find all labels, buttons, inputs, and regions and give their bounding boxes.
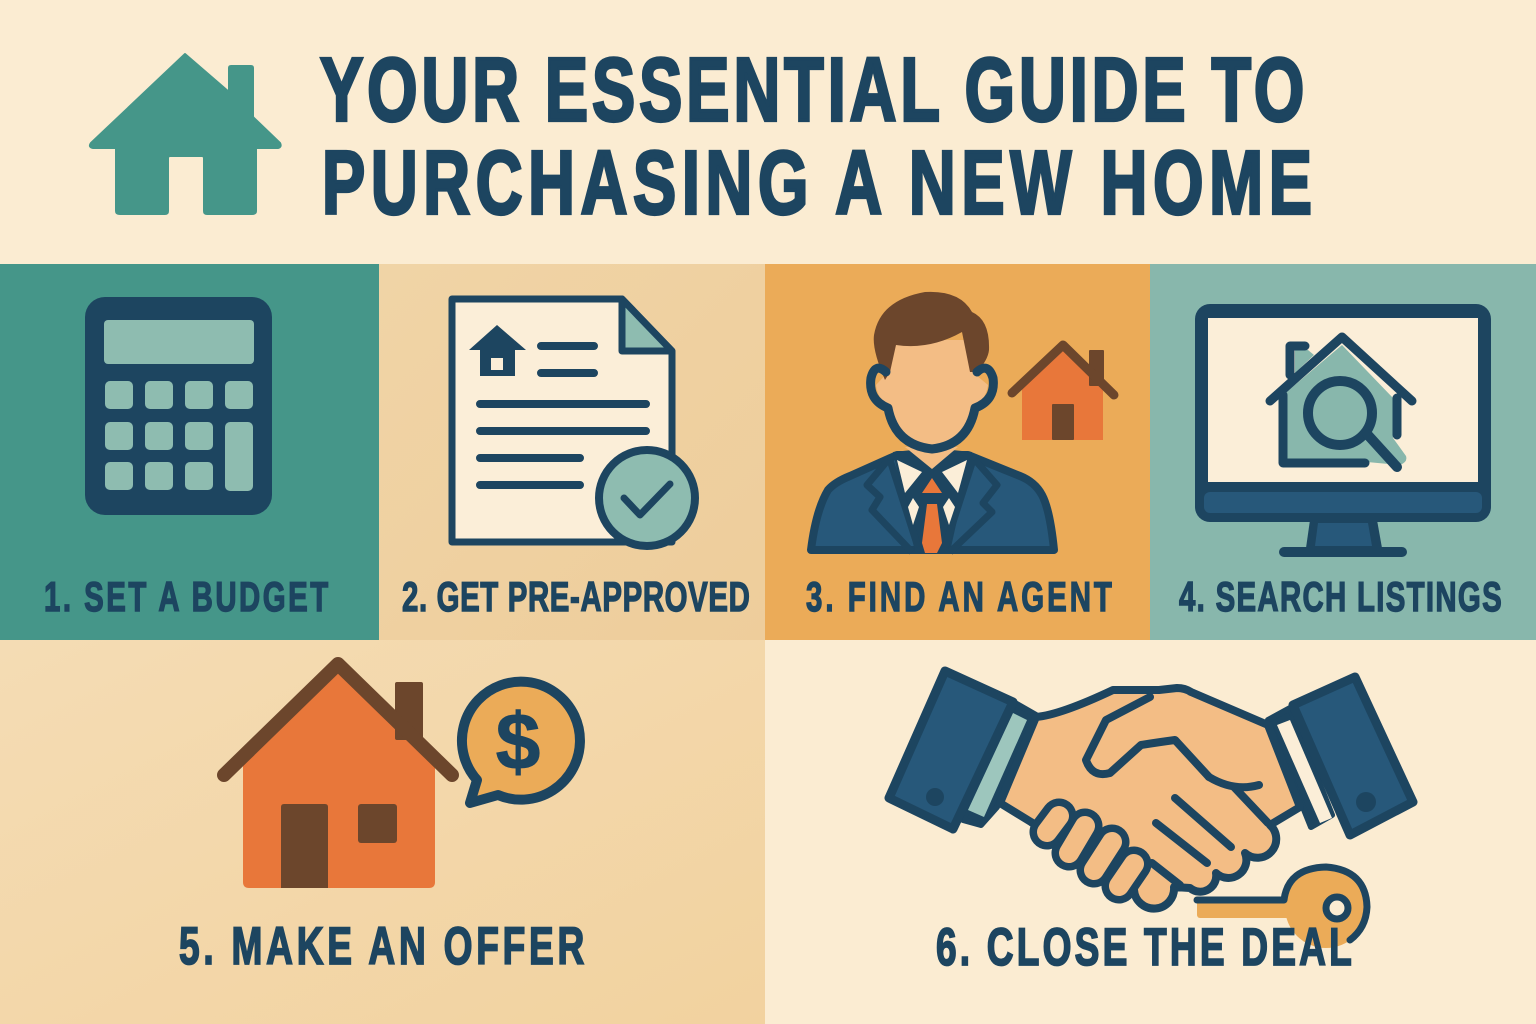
icon: key	[1197, 866, 1367, 948]
title	[320, 39, 1312, 233]
icon: handshake	[889, 671, 1413, 909]
icon: agent	[811, 292, 1054, 553]
hair	[874, 292, 989, 380]
icon: computer monitor with house search	[1195, 304, 1491, 557]
panel: step 3 find an agent	[765, 264, 1150, 640]
fingers	[1047, 816, 1134, 886]
cuffs	[963, 703, 1036, 825]
face	[876, 340, 988, 446]
icon: document with check	[452, 299, 695, 546]
icon: teal house	[90, 54, 281, 214]
label: step 2: 2. GET PRE-APPROVED	[402, 573, 750, 620]
icon: calculator	[85, 297, 272, 515]
label: step 5: 5. MAKE AN OFFER	[179, 916, 584, 976]
title: PURCHASING A NEW HOME	[322, 132, 1312, 233]
suit	[811, 455, 1054, 550]
title: YOUR ESSENTIAL GUIDE TO	[320, 39, 1304, 140]
panel: step 2 get pre-approved	[379, 264, 765, 640]
label: step 6: 6. CLOSE THE DEAL	[936, 917, 1352, 977]
icon: house with offer: $	[496, 697, 540, 786]
panel: step 4 search listings	[1150, 264, 1536, 640]
icon: house with offer	[224, 664, 580, 888]
icon: small orange house	[1012, 345, 1114, 440]
label: step 4: 4. SEARCH LISTINGS	[1179, 573, 1502, 620]
panel: step 6 close the deal	[765, 640, 1536, 1024]
label: step 1: 1. SET A BUDGET	[44, 573, 328, 620]
panel: step 5 make an offer	[0, 640, 765, 1024]
label: step 3: 3. FIND AN AGENT	[806, 573, 1112, 620]
panel: step 1 set a budget	[0, 264, 379, 640]
hands	[1000, 688, 1300, 909]
